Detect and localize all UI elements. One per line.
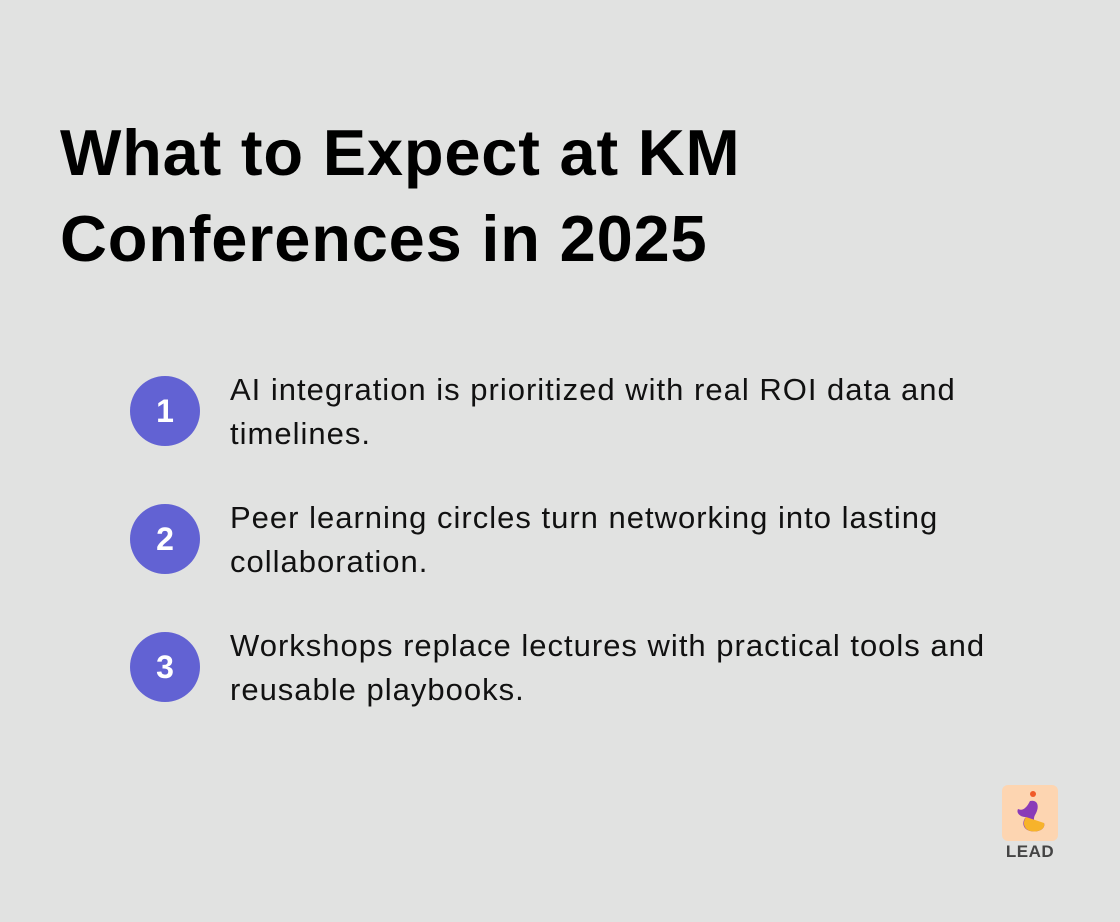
logo text: LEAD [1006,842,1054,861]
text 3 [230,628,985,707]
badge 3 [130,632,200,702]
logo [1002,785,1058,861]
text 3: reusable playbooks. [230,672,525,707]
item 2 [130,500,938,579]
badge 3: 3 [156,649,174,685]
title: Conferences in 2025 [60,202,707,275]
badge 2: 2 [156,521,174,557]
logo icon [1002,785,1058,841]
text 2 [230,500,938,579]
badge 1: 1 [156,393,174,429]
text 1 [230,372,956,451]
text 2: collaboration. [230,544,428,579]
text 3: Workshops replace lectures with practical tools and [230,628,985,663]
item 1 [130,372,956,451]
badge 2 [130,504,200,574]
title: What to Expect at KM [60,116,740,189]
title [60,116,740,275]
text 1: timelines. [230,416,371,451]
text 2: Peer learning circles turn networking into lasting [230,500,938,535]
text 1: AI integration is prioritized with real ROI data and [230,372,956,407]
badge 1 [130,376,200,446]
item 3 [130,628,985,707]
